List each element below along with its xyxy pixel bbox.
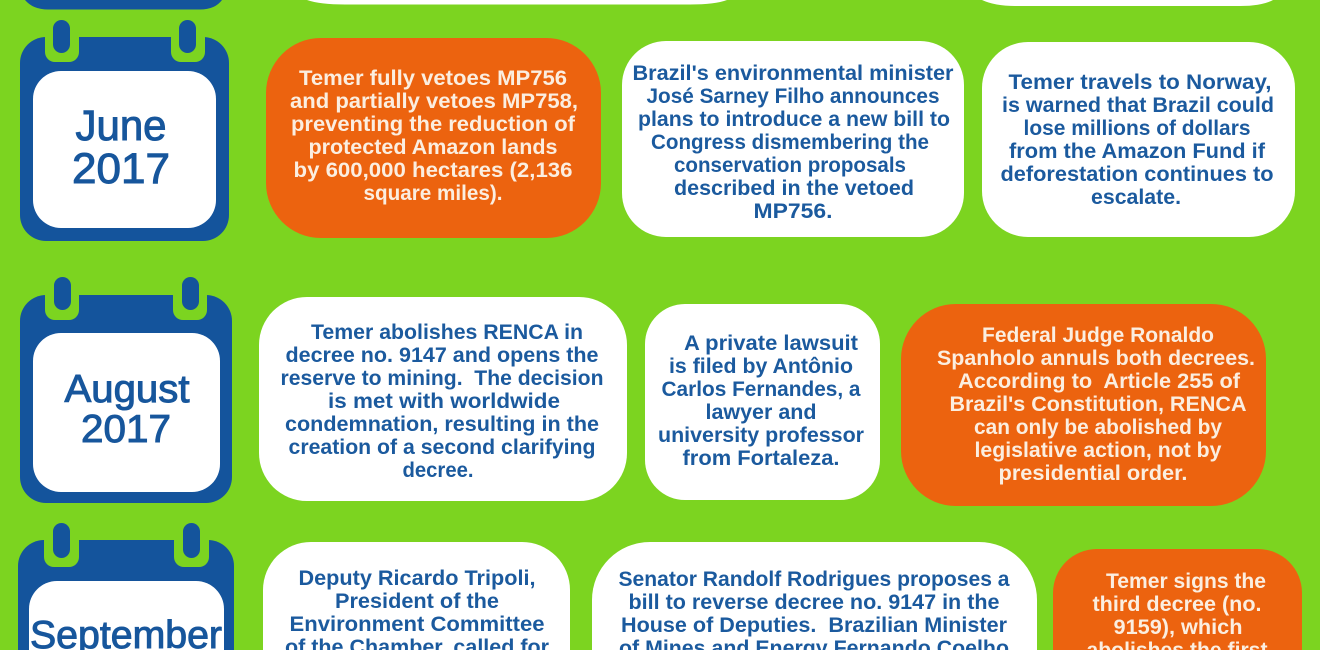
panel: RENCA abolished: decree. [402, 458, 474, 482]
panel: Norway trip: lose millions of dollars [1024, 116, 1251, 140]
panel: private lawsuit: is filed by Antônio [669, 354, 853, 378]
panel: Deputy Tripoli: President of the [335, 589, 499, 613]
panel: judge annuls decrees: legislative action, not by [974, 438, 1222, 462]
panel: Norway trip: Temer travels to Norway, [1008, 70, 1272, 94]
panel: third decree [1053, 549, 1302, 650]
panel: private lawsuit: Carlos Fernandes, a [662, 377, 861, 401]
panel: private lawsuit: from Fortaleza. [682, 446, 840, 470]
previous row remnants [25, 0, 1273, 10]
panel: environmental minister: Brazil's environmental minister [632, 61, 954, 85]
panel: Temer vetoes: and partially vetoes MP758, [290, 89, 578, 113]
panel: environmental minister: Congress dismembering the [651, 130, 929, 154]
panel: RENCA abolished: condemnation, resulting in the [285, 412, 599, 436]
panel: judge annuls decrees: Federal Judge Ronaldo [982, 323, 1214, 347]
panel: Temer vetoes: Temer fully vetoes MP756 [299, 66, 567, 90]
panel: Deputy Tripoli [263, 542, 570, 650]
panel: Norway trip: is warned that Brazil could [1002, 93, 1274, 117]
panel: Temer vetoes [266, 38, 601, 238]
calendar: August 2017: 2017 [81, 408, 171, 451]
panel: RENCA abolished: creation of a second clarifying [288, 435, 596, 459]
panel: third decree: Temer signs the [1106, 569, 1266, 593]
calendar: August 2017 [20, 277, 232, 503]
panel: Deputy Tripoli: Deputy Ricardo Tripoli, [298, 566, 536, 590]
calendar: June 2017: June [76, 102, 166, 150]
panel: Norway trip: deforestation continues to [1000, 162, 1274, 186]
panel: RENCA abolished: Temer abolishes RENCA in [311, 320, 583, 344]
calendar: June 2017 [20, 20, 229, 241]
panel: environmental minister [622, 41, 964, 237]
panel: Temer vetoes: protected Amazon lands [308, 135, 558, 159]
panel: environmental minister: MP756. [754, 199, 832, 223]
calendar: September 2017 [18, 523, 234, 650]
panel: judge annuls decrees: Brazil's Constitution, RENCA [950, 392, 1246, 416]
panel: Temer vetoes: square miles). [364, 181, 502, 205]
panel: Senator Rodrigues [592, 542, 1037, 650]
calendar: August 2017: August [64, 368, 190, 411]
panel: judge annuls decrees: According to Article 255 of [958, 369, 1241, 393]
panel: Norway trip: escalate. [1091, 185, 1181, 209]
panel: private lawsuit: lawyer and [706, 400, 816, 424]
panel: Temer vetoes: preventing the reduction of [291, 112, 576, 136]
panel: environmental minister: plans to introduce a new bill to [638, 107, 950, 131]
panel: Senator Rodrigues: Senator Randolf Rodrigues proposes a [618, 567, 1011, 591]
panel: Norway trip: from the Amazon Fund if [1009, 139, 1266, 163]
panel: private lawsuit [645, 304, 880, 500]
panel: private lawsuit: university professor [658, 423, 865, 447]
panel: Senator Rodrigues: bill to reverse decree no. 9147 in the [628, 590, 1000, 614]
panel: environmental minister: conservation proposals [674, 153, 906, 177]
panel: RENCA abolished [259, 297, 627, 501]
panel: RENCA abolished: reserve to mining. The decision [280, 366, 604, 390]
panel: environmental minister: described in the vetoed [674, 176, 914, 200]
panel: Norway trip [982, 42, 1295, 237]
panel: judge annuls decrees: Spanholo annuls both decrees. [937, 346, 1255, 370]
panel: judge annuls decrees: can only be abolished by [974, 415, 1222, 439]
panel: Temer vetoes: by 600,000 hectares (2,136 [294, 158, 573, 182]
panel: private lawsuit: A private lawsuit [684, 331, 858, 355]
panel: Deputy Tripoli: Environment Committee [290, 612, 545, 636]
panel: judge annuls decrees [901, 304, 1266, 506]
panel: Senator Rodrigues: House of Deputies. Brazilian Minister [621, 613, 1008, 637]
panel: RENCA abolished: decree no. 9147 and opens the [286, 343, 599, 367]
panel: judge annuls decrees: presidential order. [998, 461, 1188, 485]
panel: RENCA abolished: is met with worldwide [328, 389, 560, 413]
panel: third decree: third decree (no. [1092, 592, 1262, 616]
panel: environmental minister: José Sarney Filho announces [646, 84, 940, 108]
calendar: June 2017: 2017 [72, 145, 170, 193]
panel: third decree: 9159), which [1114, 615, 1242, 639]
